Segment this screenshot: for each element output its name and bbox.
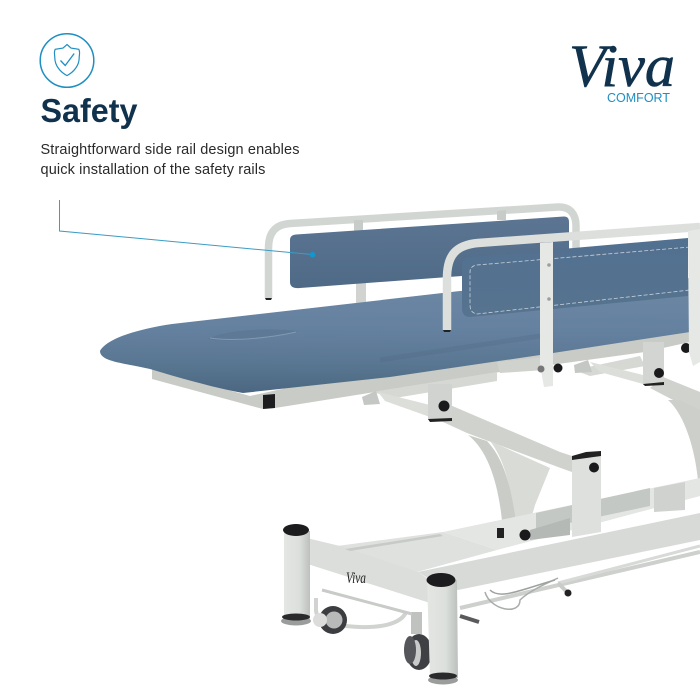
back pad <box>290 216 569 288</box>
text block: description <box>40 142 300 178</box>
base frame <box>290 513 700 603</box>
text block: description: quick installation of the safety rails <box>40 162 265 178</box>
underframe <box>152 325 690 409</box>
left leg <box>281 524 311 626</box>
second scissor arm <box>497 342 700 480</box>
product: treatment table <box>60 200 700 684</box>
mattress <box>100 278 690 393</box>
wheels and hoop <box>313 590 479 670</box>
front pad <box>462 238 690 317</box>
callout leader <box>60 200 315 258</box>
front rail <box>443 227 700 387</box>
plate: curved lift bracket <box>490 441 550 533</box>
scissor arm left <box>362 372 572 533</box>
text block: description: Straightforward side rail design enables <box>40 142 300 158</box>
right leg <box>426 573 458 684</box>
heading: Safety <box>40 92 138 129</box>
base logo: Viva <box>346 570 366 587</box>
base rails <box>443 478 700 550</box>
wires and pedal bar <box>460 546 700 609</box>
back rail <box>265 207 576 303</box>
head hole <box>208 329 298 341</box>
lift post <box>572 451 601 537</box>
logo: Viva Comfort: COMFORT <box>607 90 670 105</box>
icon: shield badge <box>40 34 94 87</box>
logo: Viva Comfort: Viva <box>569 33 675 99</box>
